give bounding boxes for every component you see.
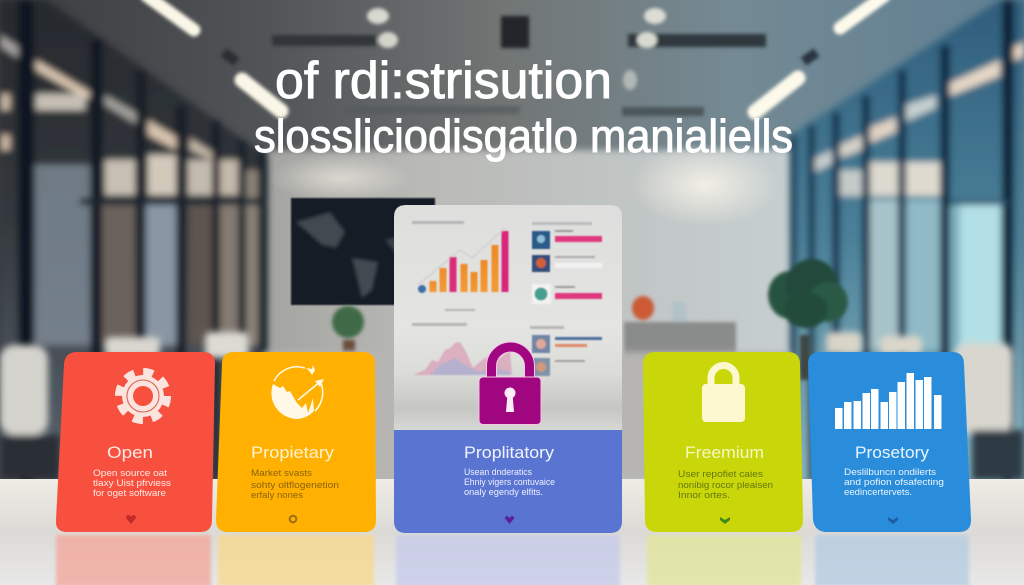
dashboard side list bbox=[532, 222, 602, 304]
description: Prosetory: Deslilbuncn ondilerts bbox=[844, 467, 936, 478]
title line two: slossliciodisgatlo manialiells bbox=[254, 110, 793, 162]
dashboard area chart bbox=[412, 323, 602, 376]
heading: Proplitatory: Proplitatory bbox=[464, 443, 555, 462]
left window wall bbox=[0, 0, 268, 480]
card: Proprietary centre dashboard bbox=[394, 205, 622, 533]
description: Propietary bbox=[251, 468, 339, 501]
description: Freemium: Innor ortes. bbox=[678, 490, 730, 501]
card: Freemium bbox=[643, 352, 803, 532]
description: Proplitatory bbox=[464, 467, 555, 498]
title bbox=[254, 52, 793, 162]
icon: heart bbox=[126, 515, 136, 524]
card reflections bbox=[56, 535, 969, 585]
description: Prosetory: and pofion ofsafecting bbox=[844, 477, 944, 488]
description: Freemium bbox=[678, 469, 773, 501]
wall map screen bbox=[291, 198, 435, 305]
title line one: of rdi:strisution bbox=[275, 52, 612, 110]
chairs and lower room bbox=[0, 332, 1024, 480]
dashboard bar chart bbox=[412, 221, 508, 311]
heading: Propietary: Propietary bbox=[251, 443, 335, 462]
glass dashboard panel bbox=[394, 205, 622, 431]
icon: gear bbox=[119, 372, 167, 420]
wall glows bbox=[268, 143, 780, 227]
description: Prosetory: eedincertervets. bbox=[844, 487, 912, 498]
description: Freemium: User repofiet caies bbox=[678, 469, 763, 480]
heading: Open: Open bbox=[107, 443, 153, 462]
description: Prosetory bbox=[844, 467, 944, 498]
description: Open: Open source oat bbox=[93, 468, 167, 479]
right window wall bbox=[790, 0, 1024, 480]
blue label panel bbox=[394, 430, 622, 533]
description: Freemium: nonibig rocor pleaisen bbox=[678, 480, 773, 491]
icon: growth circle bbox=[271, 365, 324, 419]
icon: bar chart bbox=[835, 373, 942, 429]
heading: Freemium: Freemium bbox=[685, 443, 764, 462]
card: Prosetory bbox=[808, 352, 971, 532]
back wall bbox=[262, 150, 796, 490]
table top bbox=[0, 479, 1024, 585]
icon: heart bbox=[504, 516, 514, 524]
description: Proplitatory: Ehniy vigers contuvaice bbox=[464, 477, 555, 488]
description: Open: tlaxy Uist pfrviess bbox=[93, 478, 171, 489]
description: Proplitatory: onaly egendy elfits. bbox=[464, 487, 543, 498]
icon: chevron bbox=[720, 517, 730, 524]
potted plants and shelf bbox=[332, 259, 848, 380]
description: Open bbox=[93, 468, 171, 499]
icon: padlock bbox=[479, 347, 541, 424]
ceiling lights and vents bbox=[147, 0, 884, 116]
heading: Prosetory: Prosetory bbox=[855, 443, 930, 462]
card: Proprietary bbox=[216, 352, 376, 532]
icon: chevron bbox=[888, 517, 898, 524]
description: Proplitatory: Usean dnderatics bbox=[464, 467, 532, 478]
description: Propietary: erfaly nones bbox=[251, 490, 303, 501]
description: Propietary: sohty oltflogenetion bbox=[251, 480, 339, 491]
icon: small ring bbox=[290, 516, 296, 522]
card: Open bbox=[56, 352, 215, 532]
description: Open: for oget software bbox=[93, 488, 166, 499]
description: Propietary: Market svasts bbox=[251, 468, 312, 479]
icon: open padlock bbox=[702, 366, 745, 422]
